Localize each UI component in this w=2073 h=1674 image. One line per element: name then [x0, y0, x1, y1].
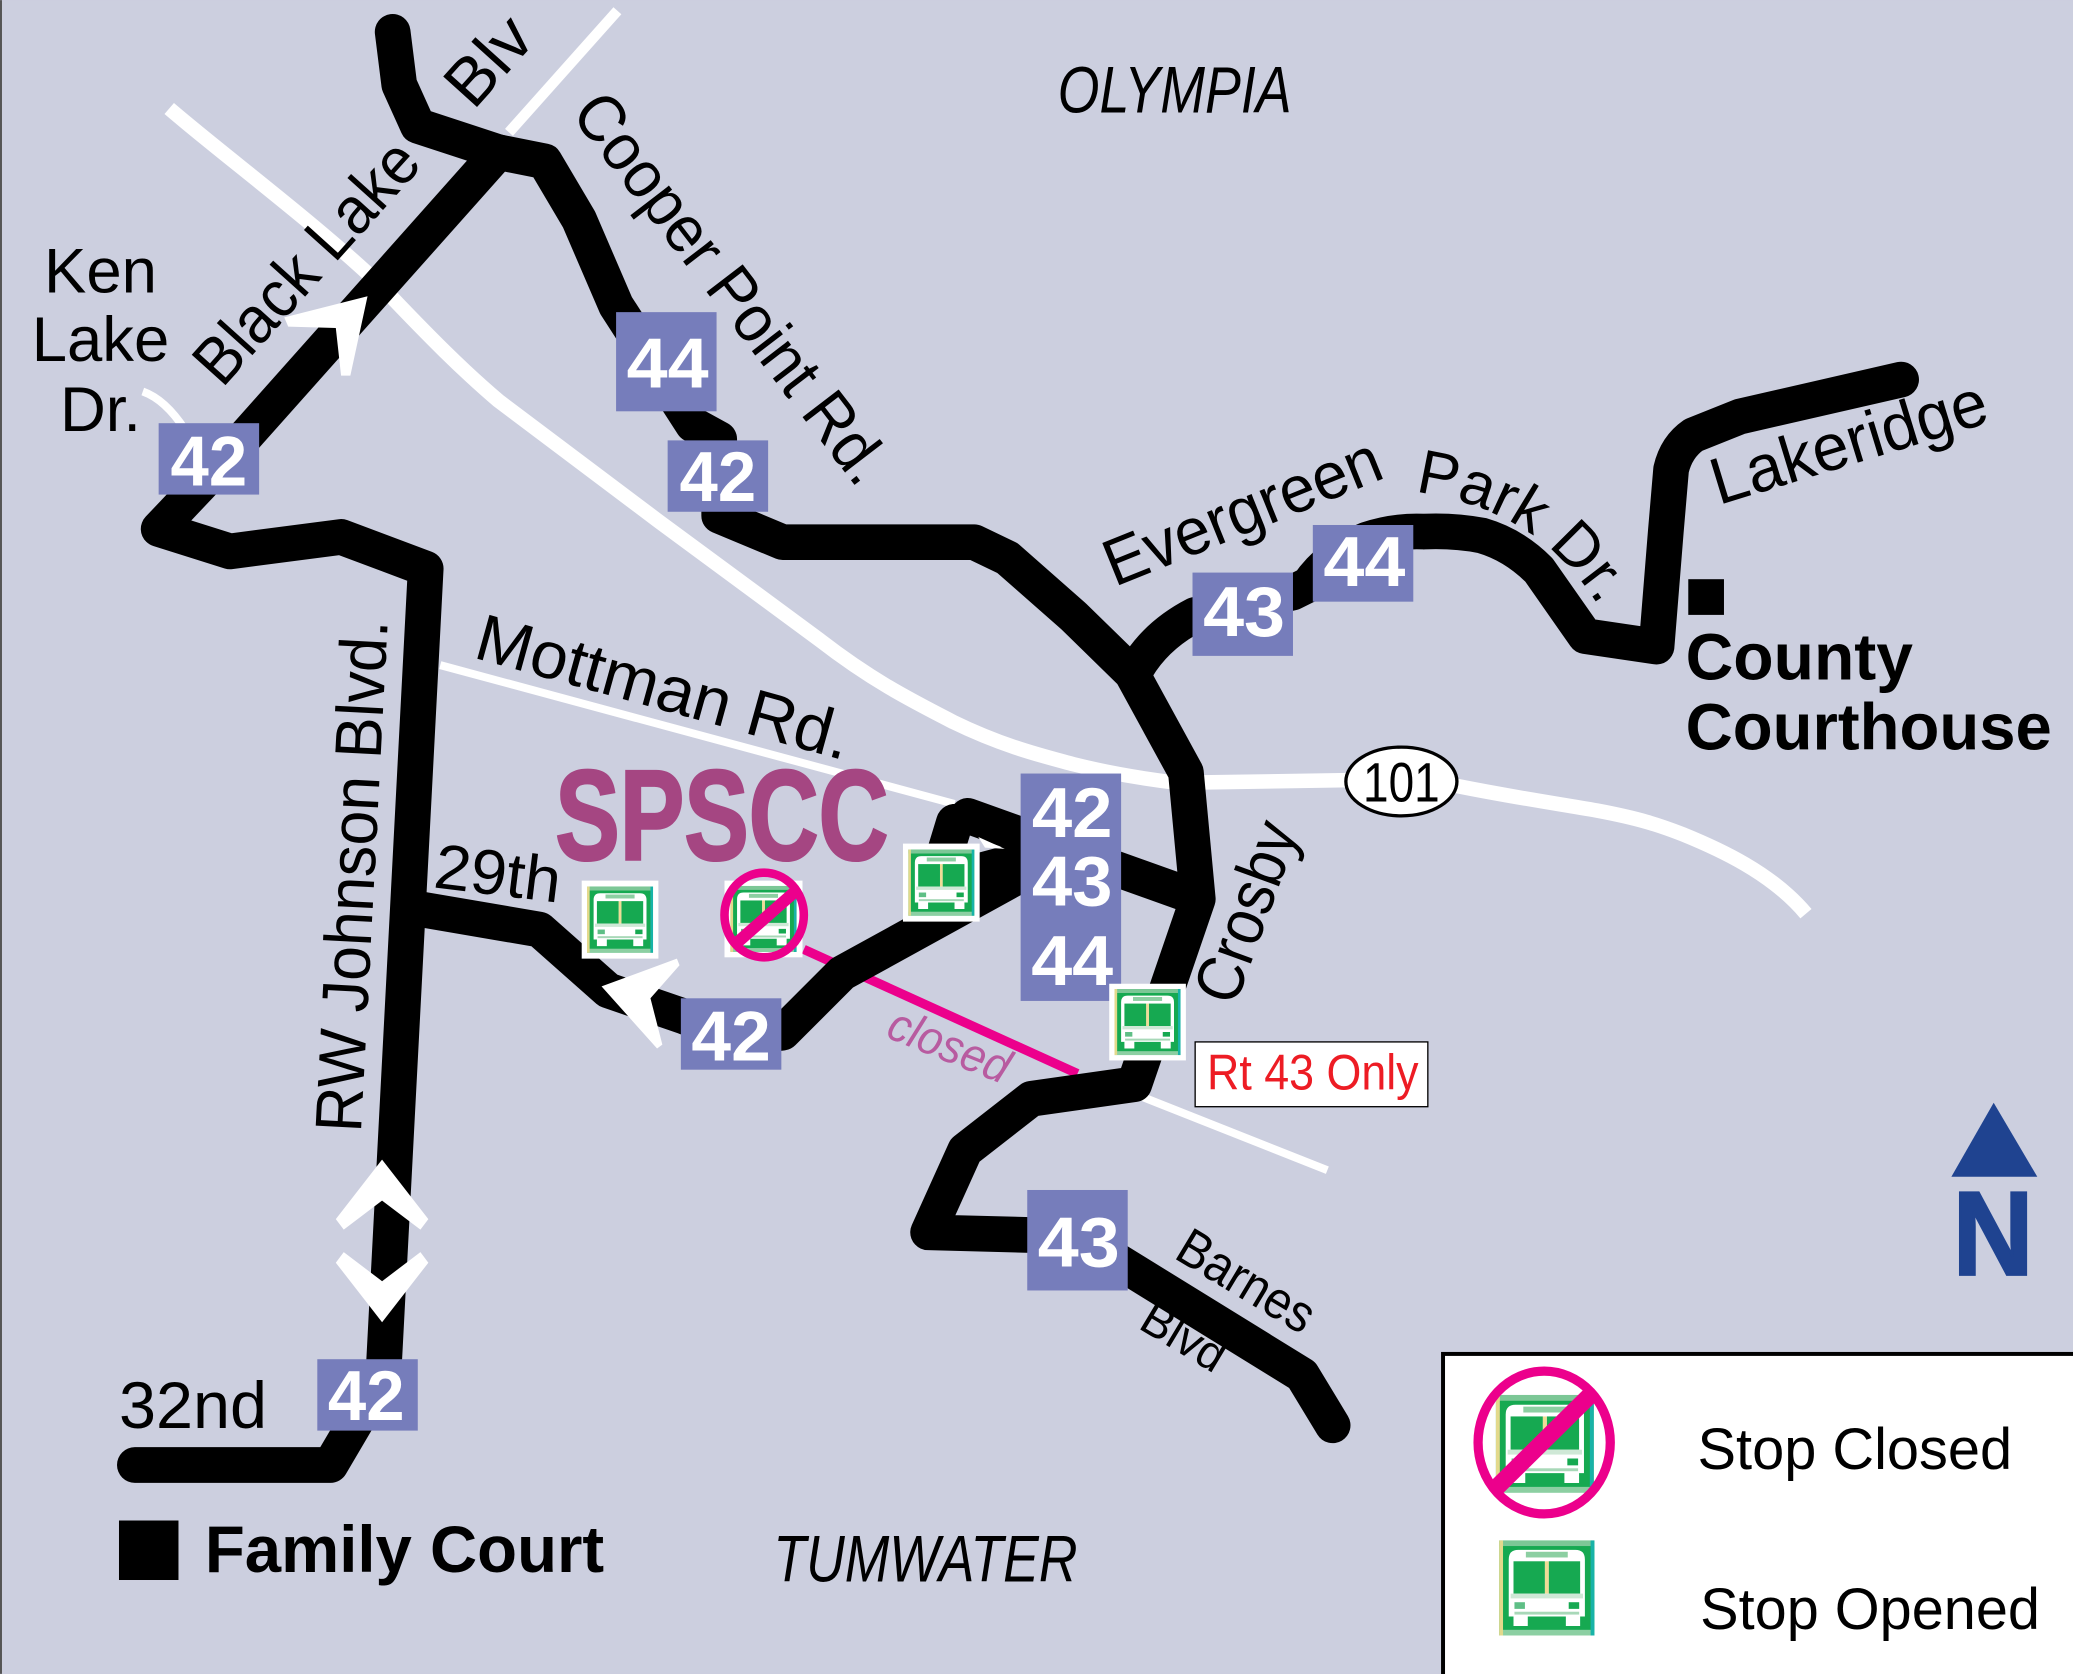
legend text: stop closed: Stop Closed	[1698, 1417, 2012, 1482]
route badge 44 Cooper Point: 44	[627, 324, 709, 402]
north arrow	[1951, 1103, 2037, 1301]
SPSCC title: SPSCC	[555, 744, 888, 887]
bus stop open east	[903, 844, 980, 922]
route badge 43 Barnes	[1027, 1190, 1128, 1290]
white sliver beside stop	[978, 837, 1005, 849]
place label: Olympia: OLYMPIA	[1058, 54, 1292, 128]
bus stop open near 29th	[582, 881, 658, 959]
street label: Ken Lake Dr.: Lake	[32, 305, 169, 375]
street label: Lakeridge: Lakeridge	[1701, 365, 1996, 520]
legend text: stop opened: Stop Opened	[1700, 1577, 2040, 1642]
route badges 42 43 44 stack: 43	[1032, 843, 1113, 921]
street path: Park Dr.	[1415, 492, 1608, 622]
closed road segment	[804, 949, 1077, 1074]
County Courthouse marker and label: Courthouse	[1686, 691, 2052, 765]
closed label: closed	[880, 998, 1019, 1095]
street label: Cooper Point Rd.: Cooper Point Rd.	[558, 78, 905, 498]
callout: Rt 43 Only: Rt 43 Only	[1207, 1045, 1419, 1101]
legend icon: stop opened	[1499, 1540, 1594, 1636]
street label: Blvd: Blvd	[1131, 1291, 1236, 1383]
route badge 42 lower: 42	[691, 997, 771, 1075]
route badges 42 43 44 stack	[1021, 774, 1121, 1001]
direction arrow: Black Lake	[284, 296, 368, 376]
street label: Ken Lake Dr.	[32, 236, 169, 445]
street label: 32nd: 32nd	[119, 1369, 267, 1443]
legend	[1443, 1354, 2073, 1674]
street label: Mottman Rd.: Mottman Rd.	[468, 600, 860, 775]
highway 101 shield: 101	[1363, 751, 1440, 813]
street label: Barnes: Barnes	[1166, 1217, 1326, 1345]
route badges 42 43 44 stack: 42	[1032, 774, 1113, 852]
street label: Crosby: Crosby	[1179, 811, 1313, 1013]
route badges 42 43 44 stack: 44	[1031, 922, 1113, 1000]
route badge 42 32nd: 42	[328, 1357, 405, 1435]
County Courthouse marker and label: County	[1686, 621, 1913, 695]
street label: Ken Lake Dr.: Ken	[44, 236, 157, 306]
street label: RW Johnson Blvd.: RW Johnson Blvd.	[302, 618, 403, 1134]
street label: 29th: 29th	[431, 832, 565, 917]
place label: Tumwater: TUMWATER	[773, 1522, 1077, 1596]
street label: Blv: Blv	[429, 1, 548, 121]
route badge 42 Black Lake: 42	[171, 422, 247, 500]
legend icon: stop closed	[1478, 1371, 1610, 1514]
street label: Evergreen: Evergreen	[1092, 422, 1392, 601]
street label: Black Lake: Black Lake	[178, 125, 435, 399]
direction arrow: 29th	[602, 959, 680, 1049]
Family Court marker and label: Family Court	[205, 1513, 604, 1587]
route badge 43 Barnes: 43	[1038, 1204, 1120, 1282]
route badge 44 Park Dr: 44	[1323, 523, 1405, 601]
direction arrow: down	[336, 1252, 428, 1322]
route badge 42 Cooper Point: 42	[680, 438, 756, 516]
County Courthouse marker and label	[1686, 579, 2052, 765]
bus stop closed at SPSCC	[724, 873, 804, 957]
left edge line	[0, 0, 2, 1674]
north arrow: N	[1953, 1168, 2033, 1301]
street label: Park Dr.: Park Dr.	[1420, 450, 1617, 602]
route badge 44 Cooper Point	[616, 312, 717, 411]
bus stop open Crosby	[1109, 984, 1186, 1060]
black bus routes	[135, 32, 1901, 1465]
direction arrow: up	[336, 1160, 428, 1230]
route badge 43 Evergreen: 43	[1203, 573, 1285, 651]
white secondary roads	[143, 11, 1806, 1170]
street label: Ken Lake Dr.: Dr.	[60, 375, 141, 445]
